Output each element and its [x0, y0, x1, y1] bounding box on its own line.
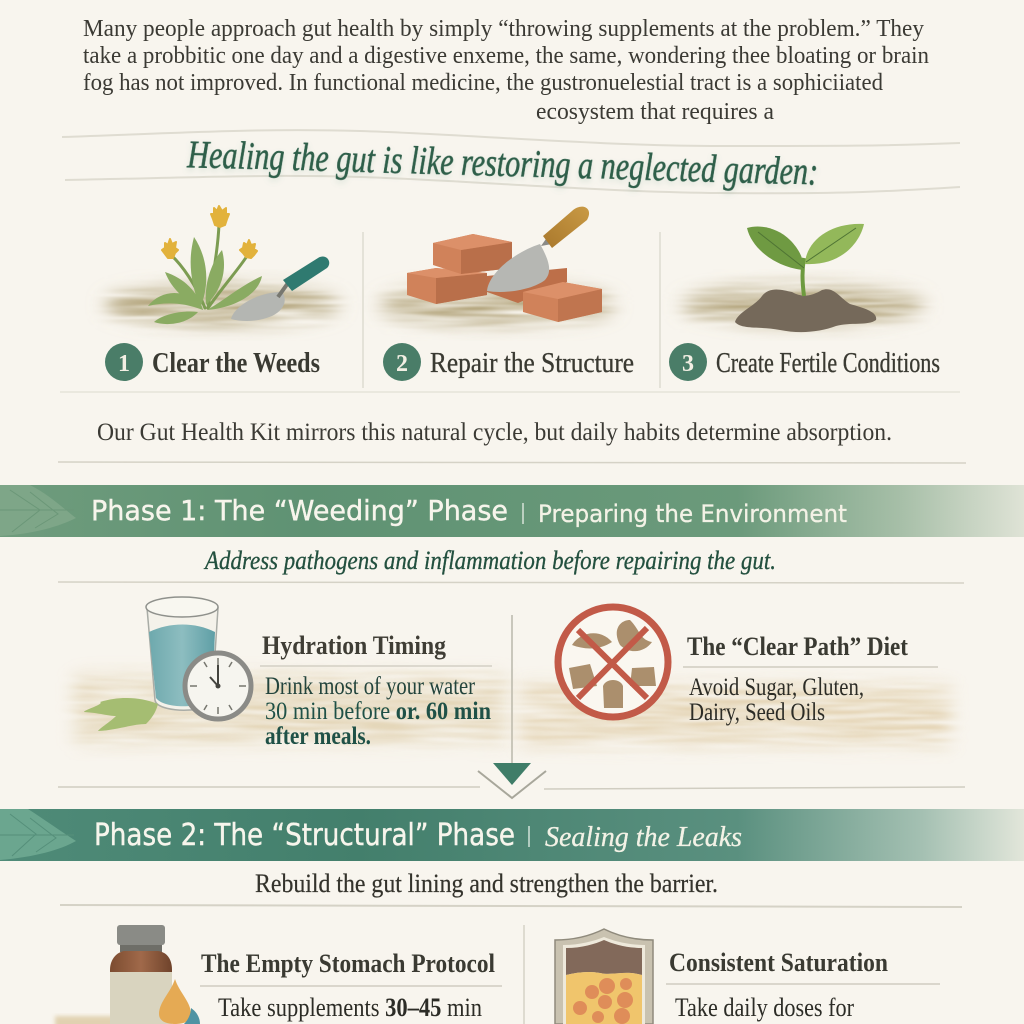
phase 2 banner	[0, 809, 1024, 861]
icon: green leaves	[84, 698, 158, 731]
badge 1: 1	[118, 351, 130, 377]
illustration: bricks and trowel	[379, 207, 615, 325]
phase 1 subtitle: Address pathogens and inflammation before repairing the gut.	[203, 546, 776, 575]
panel: empty stomach protocol: The Empty Stomach Protocol	[201, 949, 495, 978]
panel: hydration timing: after meals.	[265, 723, 371, 750]
illustration: weeds and trowel	[104, 206, 340, 325]
panel: clear path diet: The “Clear Path” Diet	[687, 632, 908, 661]
kit statement: Our Gut Health Kit mirrors this natural cycle, but daily habits determine absorption.	[97, 419, 892, 446]
phase 1 banner: Preparing the Environment	[538, 500, 847, 528]
intro paragraph	[83, 16, 929, 125]
phase 1 banner	[0, 485, 1024, 537]
panel: hydration timing: Drink most of your water	[265, 673, 476, 700]
phase 2 banner: Sealing the Leaks	[545, 821, 742, 853]
panel: hydration timing: 30 min before or. 60 min	[265, 698, 491, 725]
leaf icon 1	[0, 485, 76, 536]
icon: water glass	[146, 597, 218, 710]
panel: empty stomach protocol: Take supplements 30–45 min	[218, 993, 482, 1022]
panel: consistent saturation: Take daily doses for	[675, 993, 854, 1022]
panel: consistent saturation: Consistent Saturation	[669, 948, 888, 977]
step 2: repair the structure	[379, 207, 634, 381]
step 3: create fertile conditions	[669, 224, 940, 381]
arrow: phase 1 to phase 2	[478, 615, 546, 798]
badge 3: 3	[682, 351, 694, 377]
panel: clear path diet: Avoid Sugar, Gluten,	[689, 674, 864, 701]
panel: consistent saturation	[555, 929, 940, 1024]
icon: shield	[555, 929, 653, 1024]
label 2: Repair the Structure	[430, 348, 634, 379]
icon: clock	[185, 653, 251, 719]
phase 2 banner: Phase 2: The “Structural” Phase	[94, 818, 515, 853]
panel: clear path diet: Dairy, Seed Oils	[689, 699, 825, 726]
illustration: seedling in soil	[681, 224, 925, 332]
label 3: Create Fertile Conditions	[716, 348, 940, 379]
badge 1	[105, 343, 143, 381]
label 1: Clear the Weeds	[152, 348, 320, 379]
badge 2	[383, 343, 421, 381]
panel: empty stomach protocol	[55, 925, 502, 1024]
badge 3	[669, 343, 707, 381]
intro paragraph: take a probbitic one day and a digestive enxeme, the same, wondering thee bloating or brain	[83, 43, 929, 69]
step 1: clear the weeds	[104, 206, 340, 381]
intro paragraph: fog has not improved. In functional medicine, the gustronuelestial tract is a sophiciiated	[83, 70, 883, 96]
phase 1 banner: Phase 1: The “Weeding” Phase	[91, 494, 508, 527]
intro paragraph: ecosystem that requires a	[536, 99, 774, 125]
heading: garden metaphor: Healing the gut is like restoring a neglected garden:	[186, 133, 819, 194]
phase 2 subtitle: Rebuild the gut lining and strengthen the barrier.	[255, 869, 718, 898]
leaf icon 2	[0, 809, 76, 860]
panel: hydration timing: Hydration Timing	[262, 631, 446, 660]
icon: prohibited foods	[558, 607, 668, 717]
intro paragraph: Many people approach gut health by simply “throwing supplements at the problem.” They	[83, 16, 924, 42]
panel: hydration timing	[75, 597, 505, 750]
panel: clear path diet	[520, 607, 950, 745]
icon: supplement bottle	[110, 925, 200, 1024]
badge 2: 2	[396, 351, 408, 377]
